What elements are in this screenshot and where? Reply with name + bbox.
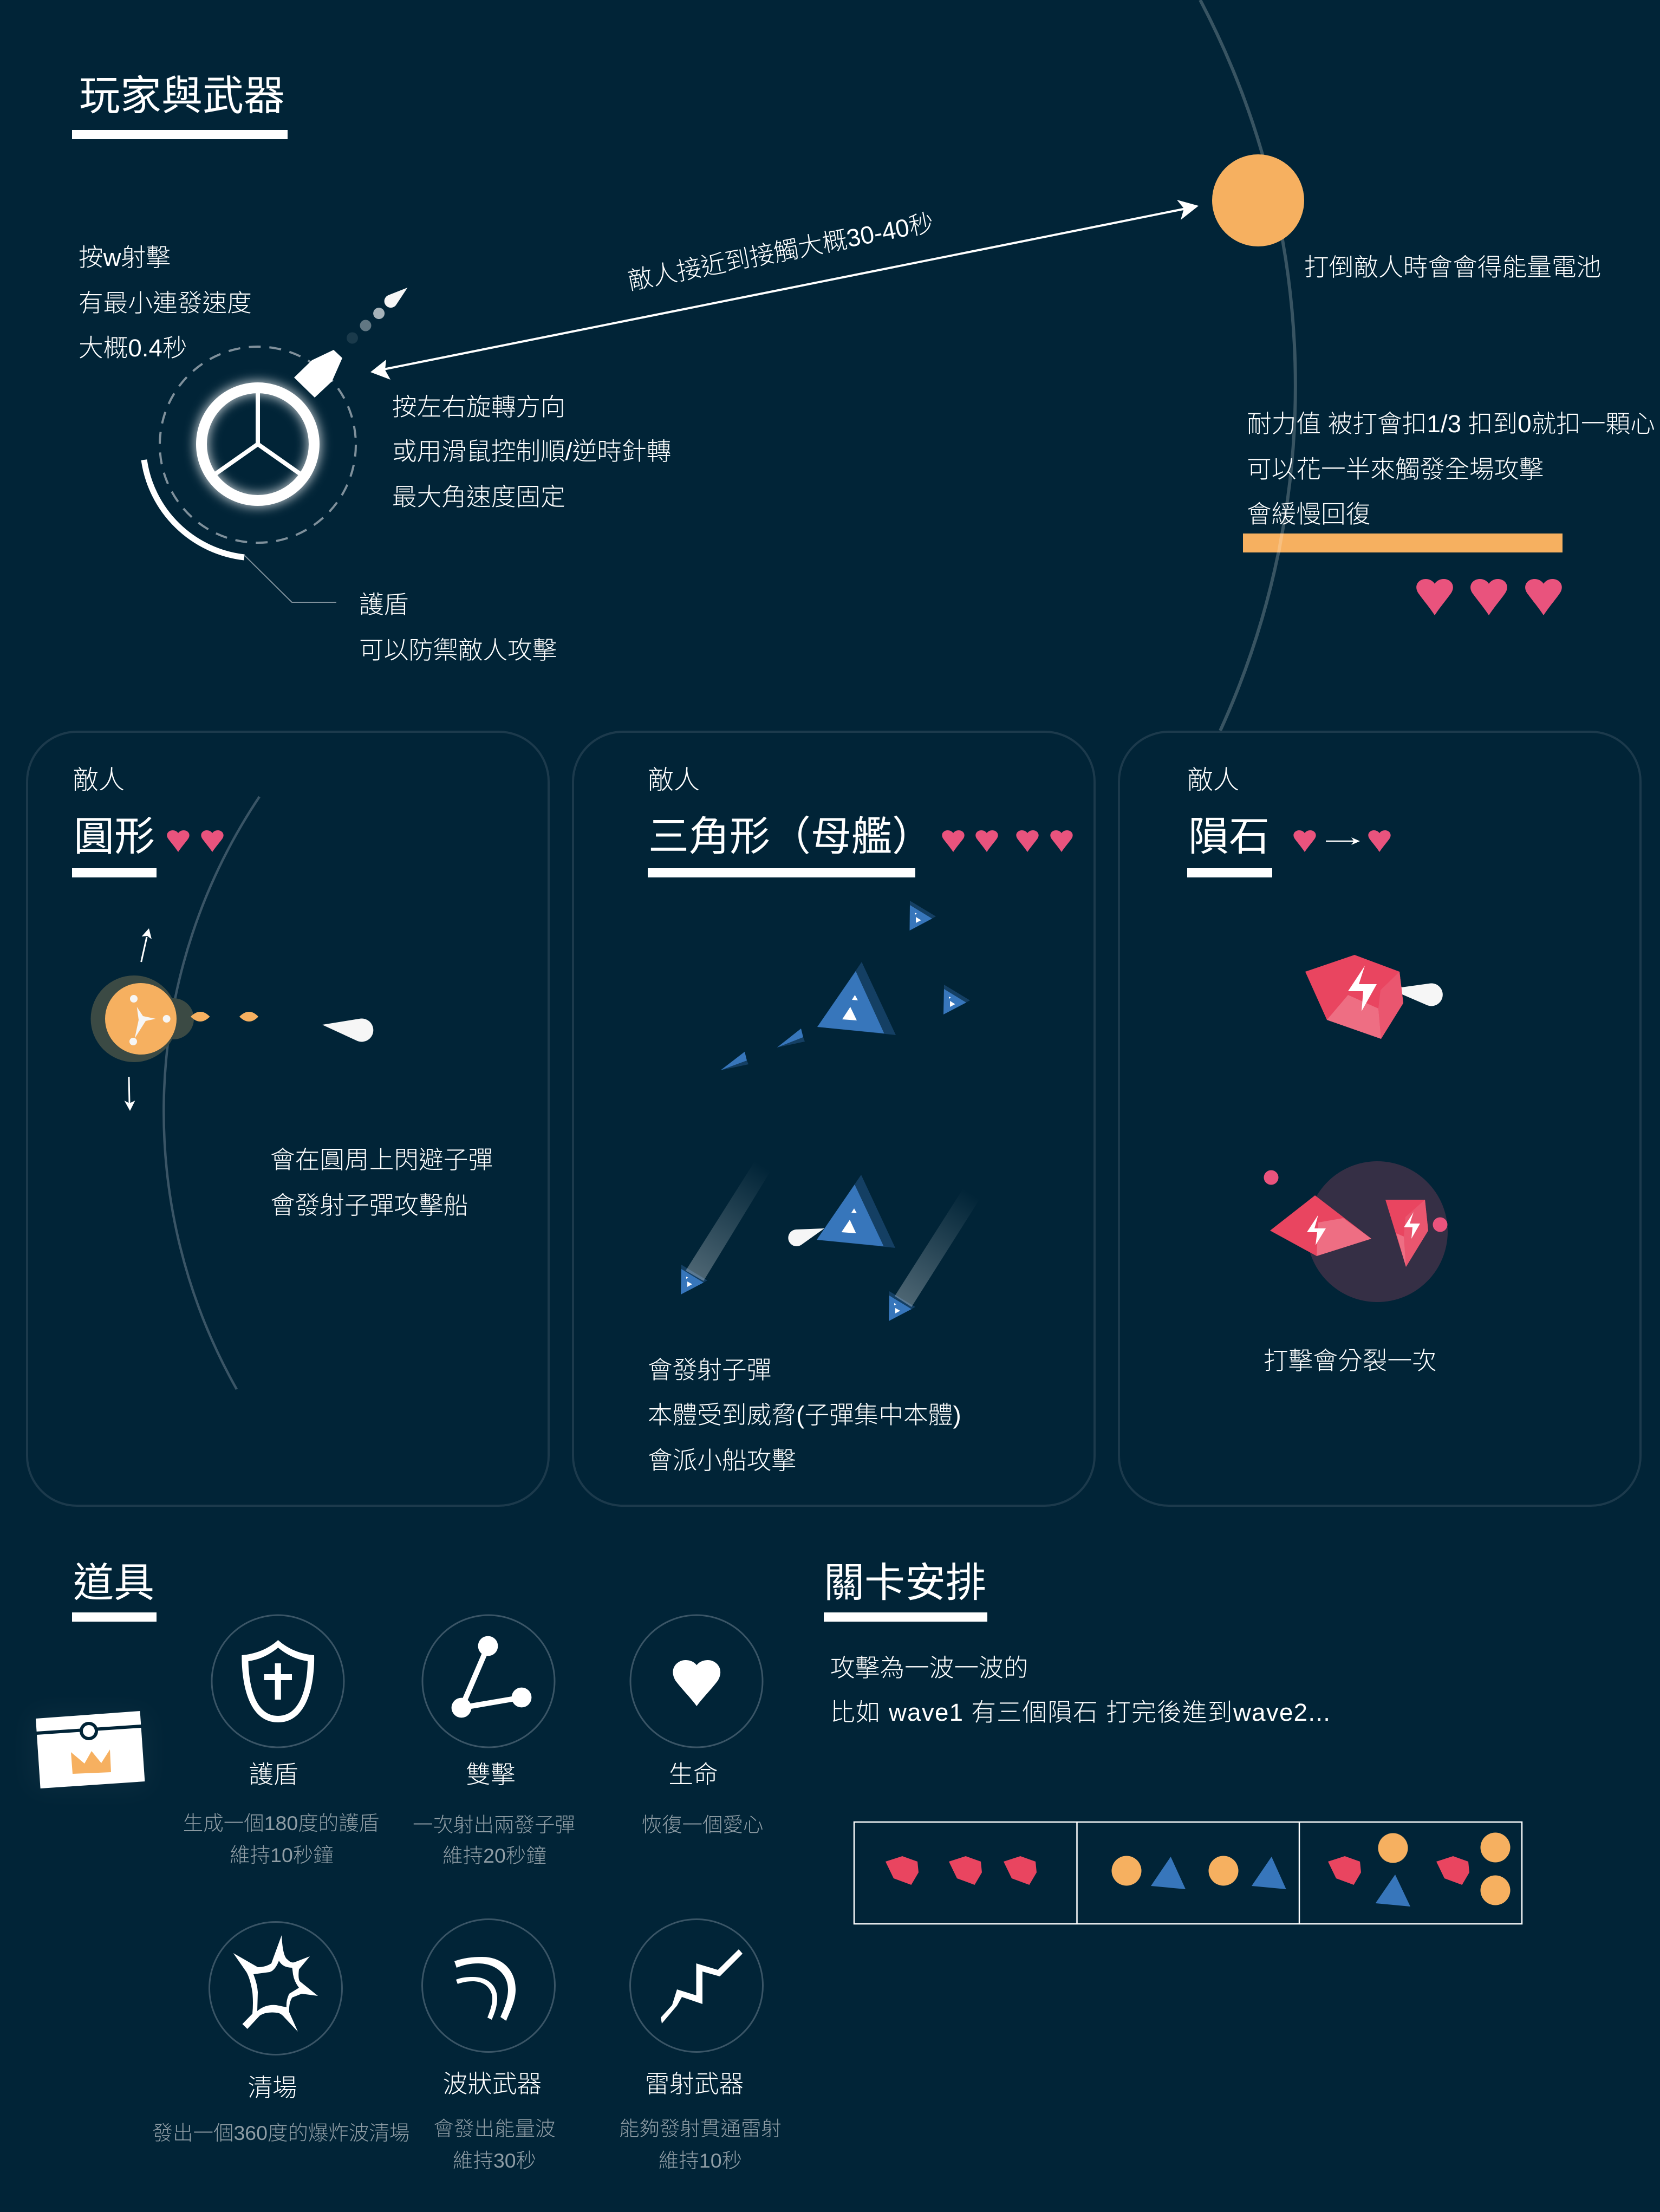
- panel: meteor: [1119, 732, 1641, 1506]
- item text: 維持20秒鐘: [442, 1844, 546, 1867]
- item: laser weapon: [619, 1920, 782, 2172]
- item text: 生命: [668, 1761, 718, 1788]
- wave 3: [1328, 1833, 1510, 1907]
- icon: burst: [209, 1922, 342, 2055]
- heading: circle enemy: [72, 766, 157, 877]
- heading: triangle: 敵人: [648, 766, 700, 795]
- text: shooting notes: 大概0.4秒: [79, 334, 187, 362]
- item text: 能夠發射貫通雷射: [619, 2117, 782, 2140]
- text: shooting notes: [79, 244, 252, 362]
- shield leader line: [244, 555, 336, 602]
- arrow label: 敵人接近到接觸大概30-40秒: [626, 209, 936, 295]
- hearts: [167, 830, 224, 852]
- ship orbit dashed ring: [160, 347, 356, 543]
- item text: [152, 2074, 410, 2144]
- item text: 雙擊: [466, 1761, 516, 1788]
- text: shield note: 護盾: [359, 591, 408, 619]
- text: battery note: 打倒敵人時會會得能量電池: [1304, 253, 1601, 281]
- ship core with glow: [201, 388, 314, 500]
- text: waves description: 比如 wave1 有三個隕石 打完後進到wave2...: [830, 1699, 1330, 1726]
- player bullet: [322, 1018, 373, 1042]
- heading: player and weapons: [72, 73, 288, 139]
- item text: 護盾: [249, 1761, 298, 1788]
- hearts: [942, 830, 1073, 852]
- text: behaviour: 會發射子彈攻擊船: [270, 1192, 468, 1219]
- heading: circle enemy: 圓形: [74, 814, 155, 859]
- table frame: [854, 1822, 1522, 1924]
- item: double shot: [413, 1615, 575, 1867]
- heading: items: 道具: [73, 1560, 154, 1605]
- item text: 會發出能量波: [433, 2117, 556, 2140]
- icon: wave arcs: [422, 1920, 555, 2052]
- item: wave weapon: [422, 1920, 556, 2172]
- panel: circle enemy: [27, 732, 549, 1506]
- text: shooting notes: 按w射擊: [79, 244, 171, 271]
- heading: meteor: [1187, 766, 1272, 877]
- item text: 一次射出兩發子彈: [413, 1813, 575, 1836]
- shield arc: [144, 460, 244, 557]
- enemy bullets: [191, 1012, 258, 1022]
- item text: [641, 1761, 764, 1836]
- heading: triangle: [648, 766, 933, 877]
- item text: 維持30秒: [453, 2149, 536, 2172]
- text: split note: 打擊會分裂一次: [1264, 1347, 1437, 1375]
- arrow up: [141, 928, 152, 962]
- durability bar: [1243, 534, 1563, 552]
- item: life: [630, 1615, 764, 1836]
- text: shield note: 可以防禦敵人攻擊: [359, 636, 557, 664]
- item text: 維持10秒鐘: [230, 1844, 334, 1866]
- mothership spawning small ships: [720, 901, 970, 1070]
- panel frame: [573, 732, 1095, 1506]
- text: durability notes: 會緩慢回復: [1247, 500, 1370, 528]
- icon: shield: [212, 1615, 344, 1747]
- text: behaviour: [270, 1146, 493, 1219]
- heading: circle enemy: 敵人: [73, 766, 125, 795]
- heading: meteor: 隕石: [1188, 814, 1270, 859]
- panel frame: [1119, 732, 1641, 1506]
- text: behaviour: [648, 1356, 961, 1474]
- item text: 波狀武器: [443, 2070, 542, 2098]
- player ship: [144, 288, 407, 602]
- text: shield note: [359, 591, 557, 664]
- item text: 維持10秒: [659, 2149, 742, 2172]
- item text: 雷射武器: [645, 2070, 744, 2098]
- lives hearts: [1416, 579, 1562, 615]
- text: durability notes: [1247, 410, 1655, 528]
- item: clear screen: [152, 1922, 410, 2144]
- text: behaviour: 本體受到威脅(子彈集中本體): [648, 1401, 961, 1429]
- panel frame: [27, 732, 549, 1506]
- text: rotation notes: 按左右旋轉方向: [392, 393, 565, 421]
- text: durability notes: 可以花一半來觸發全場攻擊: [1247, 456, 1544, 483]
- text: durability notes: 耐力值 被打會扣1/3 扣到0就扣一顆心: [1247, 410, 1655, 438]
- arrow down: [125, 1077, 135, 1111]
- wave 2: [1111, 1856, 1286, 1889]
- item text: 恢復一個愛心: [641, 1813, 764, 1836]
- heading: level arrangement: 關卡安排: [824, 1560, 986, 1605]
- meteor split: [1264, 1161, 1448, 1302]
- item text: [183, 1761, 379, 1866]
- text: waves description: 攻擊為一波一波的: [830, 1654, 1028, 1682]
- orbit arc: [1200, 0, 1296, 731]
- double arrow: distance: [370, 200, 1199, 380]
- item text: [619, 2070, 782, 2172]
- wave 1: [886, 1856, 1037, 1885]
- item text: [413, 1761, 575, 1867]
- icon: laser zigzag: [630, 1920, 763, 2052]
- icon: heart: [630, 1615, 763, 1747]
- section: player and weapons: [72, 0, 1655, 731]
- heading: triangle: 三角形（母艦）: [648, 814, 933, 859]
- ship cannon: [294, 350, 342, 398]
- text: behaviour: 會發射子彈: [648, 1356, 771, 1384]
- text: shooting notes: 有最小連發速度: [79, 289, 252, 317]
- fired bullet trail: [347, 288, 407, 343]
- icon: treasure chest: [32, 1711, 146, 1788]
- item text: 發出一個360度的爆炸波清場: [152, 2122, 410, 2144]
- text: rotation notes: [392, 393, 671, 511]
- text: behaviour: 會在圓周上閃避子彈: [270, 1146, 493, 1174]
- item text: [433, 2070, 556, 2172]
- section: items: [32, 1560, 782, 2172]
- icon: double shot: [422, 1615, 555, 1747]
- hearts with arrow: [1293, 830, 1391, 852]
- item text: 生成一個180度的護盾: [183, 1812, 379, 1834]
- orbit arc: [164, 797, 259, 1389]
- text: rotation notes: 或用滑鼠控制順/逆時針轉: [392, 438, 671, 465]
- heading: player and weapons: 玩家與武器: [79, 73, 285, 119]
- panel: triangle mothership: [573, 732, 1095, 1506]
- wave table: [854, 1822, 1522, 1924]
- item: shield: [183, 1615, 379, 1866]
- energy battery circle: [1212, 154, 1304, 246]
- text: waves description: [830, 1654, 1330, 1726]
- circle enemy sprite: [91, 975, 194, 1062]
- section: level arrangement: [824, 1560, 1522, 1924]
- meteor being hit: [1305, 955, 1443, 1039]
- heading: meteor: 敵人: [1187, 766, 1239, 795]
- text: behaviour: 會派小船攻擊: [648, 1447, 796, 1474]
- mothership under attack with ships: [681, 1162, 980, 1321]
- item text: 清場: [248, 2074, 297, 2102]
- text: rotation notes: 最大角速度固定: [392, 483, 565, 511]
